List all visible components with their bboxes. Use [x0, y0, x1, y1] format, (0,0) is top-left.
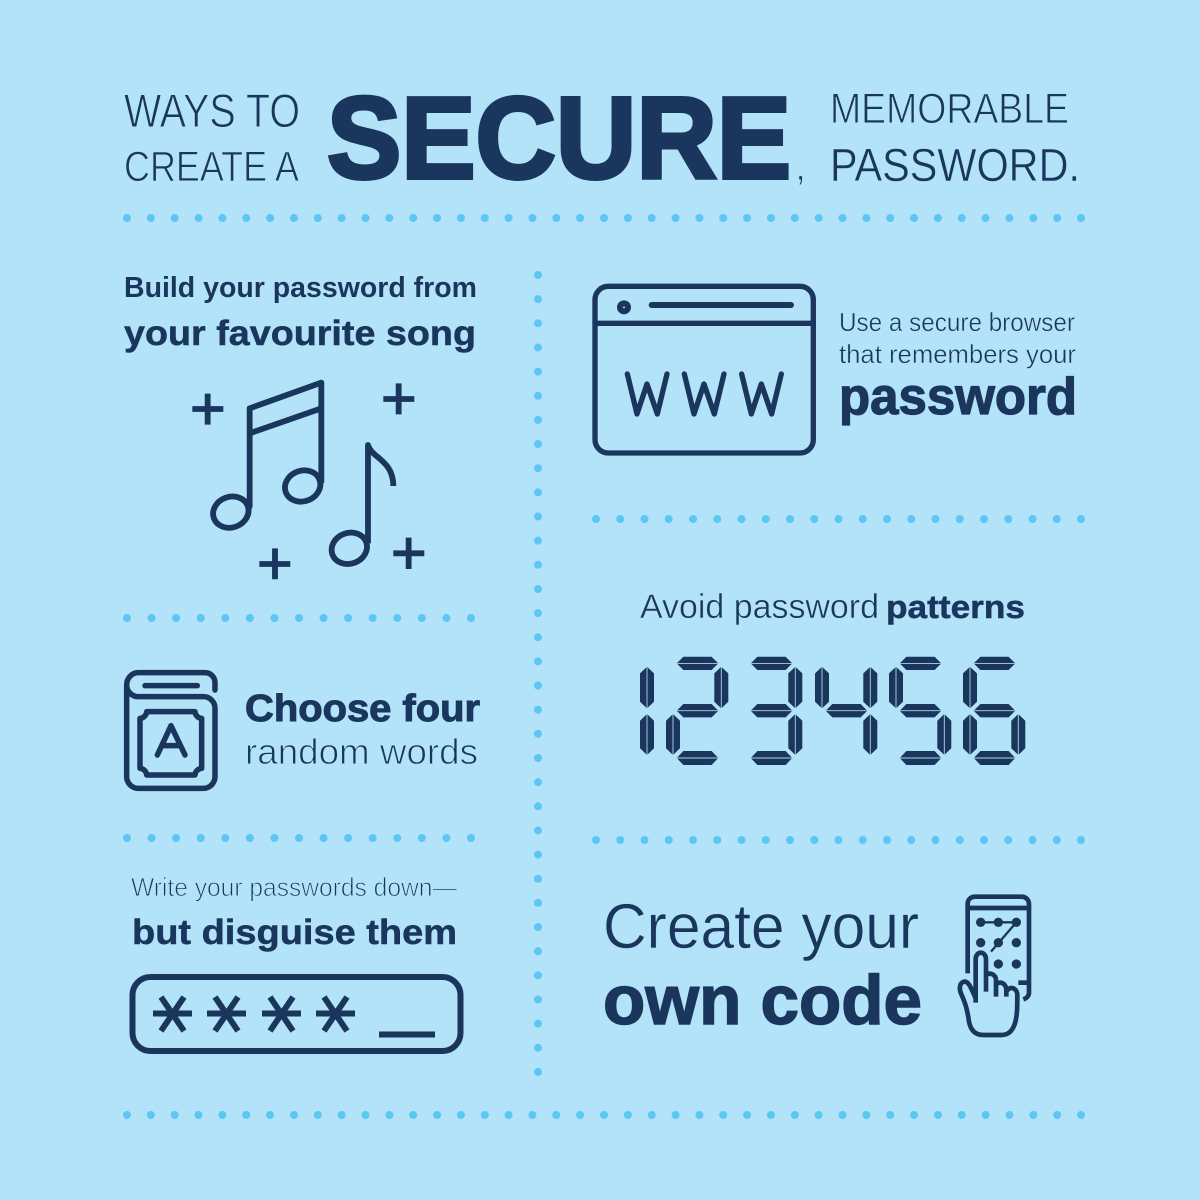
- text: choose four random words: [245, 688, 480, 772]
- digit 5: [889, 657, 951, 765]
- heading: favourite song: your favourite song: [124, 314, 476, 353]
- icon: phone with hand: [960, 897, 1029, 1035]
- heading: favourite song: Build your password from: [124, 272, 477, 304]
- panel: four random words: [127, 673, 480, 788]
- panel: favourite song: [124, 272, 477, 579]
- title: WAYS TO: [124, 85, 300, 138]
- heading: avoid password patterns: [640, 588, 1025, 626]
- panel: create your own code: [603, 892, 1029, 1039]
- text: choose four random words: Choose four: [245, 688, 480, 730]
- heading: avoid password patterns: patterns: [886, 589, 1025, 625]
- icon: book with letter A: [127, 673, 215, 788]
- title: SECURE: [327, 73, 791, 203]
- panel: avoid patterns: [640, 588, 1025, 765]
- title: ,: [795, 145, 806, 189]
- icon: music notes: [192, 383, 424, 579]
- text: secure browser: password: [839, 368, 1077, 426]
- panel: disguise passwords: [131, 872, 460, 1051]
- title: MEMORABLE: [830, 85, 1069, 133]
- title: CREATE A: [124, 143, 299, 191]
- digit 1: [640, 667, 654, 755]
- icon: browser window: [595, 286, 813, 453]
- digit 3: [751, 657, 802, 765]
- text: write passwords down: but disguise them: [132, 913, 457, 952]
- icon: password field: [132, 977, 460, 1051]
- digit 4: [815, 667, 877, 755]
- title: PASSWORD.: [830, 139, 1080, 191]
- text: create your own code: [603, 892, 922, 1039]
- text: write passwords down: Write your passwords down—: [131, 872, 457, 902]
- chart: seven segment digits 123456: [640, 657, 1025, 765]
- text: choose four random words: random words: [245, 731, 478, 772]
- text: secure browser: Use a secure browser: [839, 307, 1075, 337]
- text: secure browser: [839, 307, 1077, 426]
- heading: avoid password patterns: Avoid password: [640, 588, 879, 626]
- heading: favourite song: [124, 272, 477, 353]
- text: create your own code: Create your: [603, 892, 919, 962]
- text: write passwords down: [131, 872, 457, 952]
- digit 6: [963, 657, 1025, 765]
- title: [124, 73, 1080, 203]
- text: create your own code: own code: [603, 961, 922, 1039]
- panel: secure browser: [595, 286, 1077, 453]
- digit 2: [666, 657, 728, 765]
- text: secure browser: that remembers your: [839, 339, 1076, 369]
